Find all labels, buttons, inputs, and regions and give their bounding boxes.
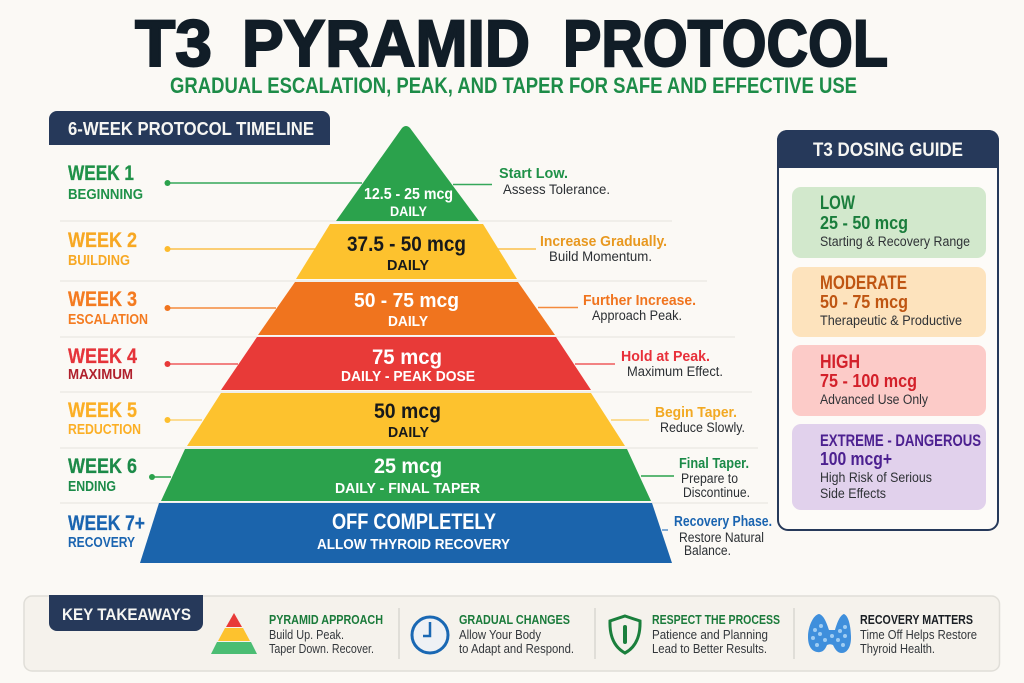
note: week 3 [583, 293, 696, 323]
card: high [792, 345, 986, 416]
week 7 label [68, 511, 145, 551]
title: T3 [135, 6, 212, 80]
takeaway: gradual changes: Allow Your Body [459, 628, 542, 642]
tier: week 3: DAILY [388, 313, 428, 330]
takeaway: recovery matters: RECOVERY MATTERS [860, 612, 973, 627]
week 5 label: REDUCTION [68, 422, 141, 438]
title: PROTOCOL [563, 6, 888, 80]
card: moderate: Therapeutic & Productive [820, 313, 962, 328]
title: PYRAMID [242, 6, 530, 80]
note: week 3: Approach Peak. [592, 308, 682, 323]
note: week 6: Discontinue. [683, 485, 750, 500]
week 1 label: BEGINNING [68, 187, 143, 203]
panel: dosing guide [777, 130, 999, 530]
note: week 5: Reduce Slowly. [660, 420, 745, 435]
note: week 7: Balance. [684, 543, 731, 558]
takeaway: pyramid approach: Taper Down. Recover. [269, 642, 374, 656]
tier: week 1 [336, 126, 479, 221]
note: week 1 [499, 166, 610, 197]
note: week 4 [621, 349, 723, 379]
week 3 label: WEEK 3 [68, 287, 137, 311]
tier: week 7: ALLOW THYROID RECOVERY [317, 536, 510, 553]
takeaway: gradual changes: to Adapt and Respond. [459, 642, 574, 656]
week labels [68, 161, 148, 551]
icon: thyroid [808, 614, 851, 653]
card: high: 75 - 100 mcg [820, 371, 917, 391]
card: low [792, 187, 986, 258]
takeaway: respect the process: Lead to Better Results. [652, 642, 767, 656]
timeline heading: 6-WEEK PROTOCOL TIMELINE [68, 119, 314, 139]
notes beside pyramid [499, 166, 772, 558]
card: high: HIGH [820, 352, 860, 373]
note: week 5 [655, 405, 745, 435]
week 4 label: MAXIMUM [68, 367, 133, 383]
note: week 7 [674, 514, 772, 558]
card: moderate: 50 - 75 mcg [820, 292, 908, 312]
tier: week 5 [187, 393, 625, 446]
takeaway: pyramid approach: PYRAMID APPROACH [269, 612, 383, 627]
note: week 1: Start Low. [499, 166, 568, 182]
week 3 label: ESCALATION [68, 312, 148, 328]
takeaway: recovery matters: Time Off Helps Restore [860, 628, 977, 642]
tier: week 2: 37.5 - 50 mcg [347, 233, 466, 256]
note: week 6: Final Taper. [679, 456, 749, 472]
tier: week 2: DAILY [387, 257, 429, 274]
week 6 label [68, 454, 137, 495]
pyramid [140, 126, 672, 563]
card: low: 25 - 50 mcg [820, 213, 908, 233]
tier: week 7 [140, 503, 672, 563]
tier: week 7: OFF COMPLETELY [332, 509, 496, 534]
takeaway: pyramid approach [269, 612, 383, 656]
connector lines [149, 180, 674, 530]
card: extreme: EXTREME - DANGEROUS [820, 431, 981, 450]
note: week 2: Increase Gradually. [540, 234, 667, 250]
tier: week 6 [161, 449, 651, 501]
timeline heading [49, 111, 330, 145]
tier: week 4: DAILY - PEAK DOSE [341, 368, 475, 385]
tier: week 4 [221, 337, 591, 390]
week 4 label [68, 344, 137, 383]
note: week 3: Further Increase. [583, 293, 696, 309]
tier: week 5: 50 mcg [374, 400, 441, 423]
icon: clock [412, 617, 448, 653]
card: extreme: High Risk of Serious [820, 470, 932, 485]
note: week 4: Hold at Peak. [621, 349, 710, 365]
tier: week 3: 50 - 75 mcg [354, 290, 459, 312]
note: week 7: Restore Natural [679, 530, 764, 545]
takeaway: respect the process: Patience and Planning [652, 628, 768, 642]
dosing guide header [777, 130, 999, 168]
week 5 label: WEEK 5 [68, 398, 137, 422]
note: week 2: Build Momentum. [549, 249, 652, 264]
note: week 2 [540, 234, 667, 264]
tier: week 6: DAILY - FINAL TAPER [335, 480, 480, 497]
note: week 6: Prepare to [681, 471, 738, 486]
card: extreme: Side Effects [820, 486, 886, 501]
tier: week 1: DAILY [390, 203, 428, 219]
week 2 label [68, 228, 137, 269]
tier: week 2 [296, 224, 517, 279]
week 6 label: ENDING [68, 479, 116, 495]
takeaway: respect the process: RESPECT THE PROCESS [652, 612, 780, 627]
takeaway: gradual changes [459, 612, 574, 656]
key takeaways label: KEY TAKEAWAYS [62, 605, 191, 624]
subtitle: GRADUAL ESCALATION, PEAK, AND TAPER FOR SAFE AND EFFECTIVE USE [170, 73, 857, 98]
key takeaways label [49, 595, 203, 631]
note: week 5: Begin Taper. [655, 405, 737, 421]
week 4 label: WEEK 4 [68, 344, 137, 368]
card: low: Starting & Recovery Range [820, 234, 970, 249]
panel: key takeaways [24, 595, 1000, 671]
week 7 label: WEEK 7+ [68, 511, 145, 535]
week 2 label: WEEK 2 [68, 228, 137, 252]
takeaway: respect the process [652, 612, 780, 656]
takeaway: recovery matters [860, 612, 977, 656]
week 3 label [68, 287, 148, 328]
card: moderate [792, 267, 986, 337]
note: week 4: Maximum Effect. [627, 364, 723, 379]
tier: week 1: 12.5 - 25 mcg [364, 186, 453, 203]
icon: shield [610, 616, 640, 653]
card: high: Advanced Use Only [820, 392, 928, 407]
week 6 label: WEEK 6 [68, 454, 137, 478]
week 1 label: WEEK 1 [68, 161, 134, 185]
week 5 label [68, 398, 141, 438]
card: low: LOW [820, 193, 855, 214]
icon: mini pyramid [211, 613, 257, 654]
dosing guide header: T3 DOSING GUIDE [813, 140, 963, 161]
title [135, 6, 888, 80]
note: week 6 [679, 456, 750, 500]
takeaway: pyramid approach: Build Up. Peak. [269, 628, 344, 642]
note: week 7: Recovery Phase. [674, 514, 772, 530]
card: moderate: MODERATE [820, 273, 907, 294]
tier: week 5: DAILY [388, 424, 429, 441]
note: week 1: Assess Tolerance. [503, 182, 610, 197]
takeaway: gradual changes: GRADUAL CHANGES [459, 612, 570, 627]
week 2 label: BUILDING [68, 253, 130, 269]
week 7 label: RECOVERY [68, 535, 135, 551]
card: extreme: 100 mcg+ [820, 449, 892, 469]
card: extreme [792, 424, 986, 510]
tier: week 4: 75 mcg [372, 346, 442, 369]
takeaway: recovery matters: Thyroid Health. [860, 642, 935, 656]
tier: week 6: 25 mcg [374, 455, 442, 478]
tier: week 3 [258, 282, 555, 335]
week 1 label [68, 161, 143, 203]
